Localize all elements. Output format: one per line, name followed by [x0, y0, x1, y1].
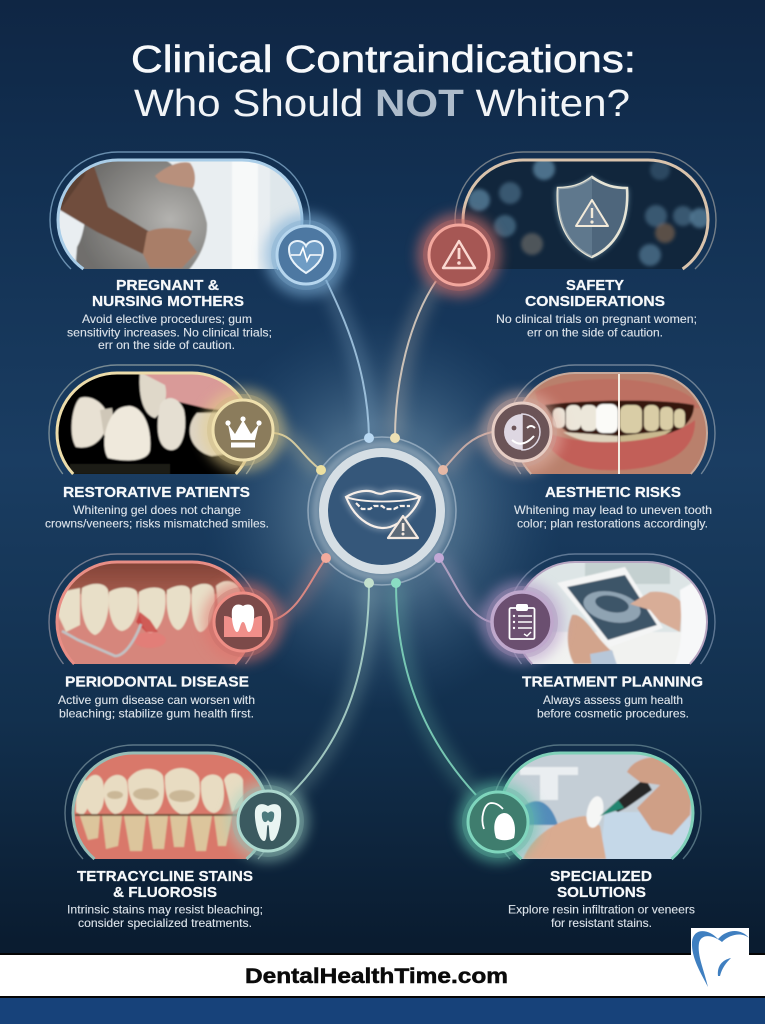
text block: Intrinsic stains may resist bleaching; [67, 902, 263, 916]
heading [525, 277, 665, 310]
frame: pill border [500, 753, 693, 859]
heading: RESTORATIVE PATIENTS [63, 484, 250, 501]
frame: outer ring [507, 554, 715, 664]
text block [67, 902, 263, 930]
heading: SAFETY [566, 277, 624, 294]
text block: Explore resin infiltration or veneers [508, 902, 695, 916]
text block: color; plan restorations accordingly. [517, 516, 708, 530]
panel: restorative patients [45, 365, 285, 530]
footer site name: DentalHealthTime.com [245, 965, 508, 988]
panel: tetracycline stains and fluorosis [65, 745, 309, 930]
text block [45, 503, 269, 530]
heading: AESTHETIC RISKS [545, 484, 681, 501]
frame: pill border [57, 373, 252, 474]
title: Who Should NOT Whiten? [134, 83, 630, 125]
central hub: lips with warning icon [308, 433, 456, 588]
heading: SOLUTIONS [557, 884, 646, 901]
frame: pill border [515, 562, 707, 664]
footer band [0, 953, 765, 1024]
icon: warning triangle [388, 516, 418, 538]
icon: lips [346, 491, 420, 528]
text block: No clinical trials on pregnant women; [496, 312, 697, 326]
text block [67, 312, 272, 352]
photo: half-whitened smile [524, 374, 706, 474]
title: Clinical Contraindications: [131, 39, 636, 81]
frame: outer ring [49, 554, 260, 664]
photo: pregnant belly [60, 162, 300, 269]
icon: tooth logo [691, 928, 749, 987]
icon: warning triangle [417, 213, 501, 297]
text block: Whitening may lead to uneven tooth [514, 503, 712, 517]
photo: crowns and veneers [58, 374, 243, 474]
text block [537, 693, 689, 720]
panel: pregnant and nursing mothers [50, 150, 348, 352]
text block: Avoid elective procedures; gum [82, 312, 252, 326]
heading [77, 868, 253, 901]
panel: safety considerations [417, 152, 716, 340]
heading [550, 868, 652, 901]
frame: pill border [515, 373, 707, 474]
icon: heart with pulse [264, 213, 348, 297]
text block: for resistant stains. [551, 916, 652, 930]
photo: veneer being applied [506, 754, 692, 859]
panel: aesthetic risks [481, 365, 715, 530]
photo: tablet with dental x-ray [525, 563, 706, 664]
frame: pill border [73, 753, 268, 859]
icon: tooth in inflamed gum [202, 581, 284, 663]
text block: Active gum disease can worsen with [58, 693, 255, 707]
icon: half smiling face [481, 391, 563, 473]
icon: clipboard checklist [480, 580, 564, 664]
frame: outer ring [455, 152, 716, 269]
frame: outer ring [49, 365, 260, 474]
frame: pill border [463, 160, 708, 269]
heading: SPECIALIZED [550, 868, 652, 885]
frame: pill border [57, 562, 252, 664]
panel: specialized solutions [457, 745, 701, 930]
text block: Always assess gum health [543, 693, 683, 707]
icon: dental crown and veneer [457, 781, 539, 863]
icon: tooth cross-section [227, 780, 309, 862]
photo: stained teeth [74, 754, 262, 859]
title [131, 39, 636, 125]
text block: Whitening gel does not change [73, 503, 241, 517]
frame: pill border [58, 160, 302, 269]
connector nodes [316, 433, 448, 588]
heading: CONSIDERATIONS [525, 293, 665, 310]
heading [92, 277, 244, 310]
heading: PREGNANT & [116, 277, 219, 294]
heading: & FLUOROSIS [113, 884, 217, 901]
connector glow [274, 280, 492, 795]
heading: TREATMENT PLANNING [522, 674, 703, 690]
photo: gum disease with probe [58, 564, 242, 664]
text block [508, 902, 695, 930]
text block: before cosmetic procedures. [537, 706, 689, 720]
text block: err on the side of caution. [98, 338, 235, 352]
frame: outer ring [65, 745, 276, 859]
text block: sensitivity increases. No clinical trials; [67, 326, 272, 340]
heading: TETRACYCLINE STAINS [77, 868, 253, 885]
heading: PERIODONTAL DISEASE [65, 674, 249, 690]
photo: glowing shield with bokeh [464, 162, 706, 269]
heading: NURSING MOTHERS [92, 293, 244, 310]
frame: outer ring [492, 745, 701, 859]
text block [514, 503, 712, 530]
text block [496, 312, 697, 340]
frame: outer ring [507, 365, 715, 474]
panel: treatment planning [480, 554, 715, 720]
frame: outer ring [50, 152, 310, 269]
panel: periodontal disease [49, 554, 284, 720]
text block: consider specialized treatments. [78, 916, 252, 930]
text block: err on the side of caution. [527, 326, 663, 340]
text block: crowns/veneers; risks mismatched smiles. [45, 516, 269, 530]
icon: crown [201, 388, 285, 472]
text block: bleaching; stabilize gum health first. [59, 706, 254, 720]
connector lines [274, 280, 492, 795]
text block [58, 693, 255, 720]
